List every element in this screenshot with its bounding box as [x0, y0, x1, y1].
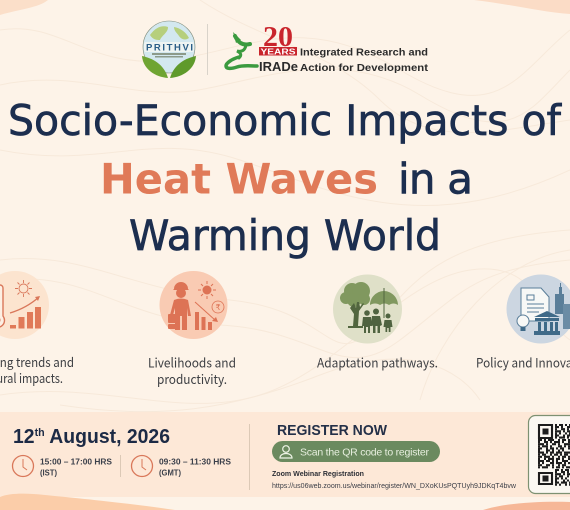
date: th [35, 427, 45, 439]
event information band [0, 412, 570, 497]
time: GMT: (GMT) [159, 468, 181, 478]
time: IST: 15:00 – 17:00 HRS [40, 458, 113, 466]
date: August, 2026 [45, 426, 170, 448]
title: in a [398, 154, 473, 204]
register pill button [272, 441, 440, 462]
logo: IRADe 20 years [226, 21, 429, 74]
caption: livelihoods: productivity. [157, 369, 227, 388]
registration link [272, 471, 517, 490]
icon: livelihoods: ₹ [215, 303, 221, 312]
registration link: Zoom Webinar Registration [272, 471, 364, 478]
caption: livelihoods: Livelihoods and [148, 352, 236, 372]
logo: IRADe 20 years: Action for Development [300, 63, 429, 74]
icon: adaptation [333, 274, 402, 344]
register heading: REGISTER NOW [277, 422, 388, 439]
title [8, 96, 562, 260]
caption: warming trends [0, 352, 74, 387]
icon: livelihoods [160, 271, 228, 339]
time: GMT [132, 456, 232, 478]
logo: PRITHVI [142, 21, 196, 78]
icon: warming trends [0, 271, 49, 339]
title: Warming World [129, 211, 441, 260]
time: IST: (IST) [40, 468, 57, 478]
register pill button: Scan the QR code to register [300, 446, 430, 458]
bottom waves [0, 494, 570, 510]
logo: PRITHVI: PRITHVI [146, 42, 193, 54]
icon: policy [506, 274, 570, 344]
registration link: https://us06web.zoom.us/webinar/register/WN_DXoKUsPQTUyh9JDKqT4bvw [272, 483, 517, 490]
QR code [528, 416, 570, 494]
logo: IRADe 20 years: YEARS [260, 48, 296, 56]
title: Socio-Economic Impacts of [8, 96, 562, 145]
title: Heat Waves [100, 154, 378, 204]
time: GMT: 09:30 – 11:30 HRS [159, 458, 232, 466]
top corner waves [0, 0, 570, 15]
caption: livelihoods [148, 352, 236, 388]
logo: IRADe 20 years: Integrated Research and [300, 48, 428, 58]
logo: IRADe 20 years: IRADe [259, 59, 298, 74]
time: IST [12, 456, 113, 478]
logo: IRADe 20 years: 20 [263, 21, 293, 53]
caption: adaptation: Adaptation pathways. [317, 352, 438, 372]
date: 12 [13, 426, 35, 448]
